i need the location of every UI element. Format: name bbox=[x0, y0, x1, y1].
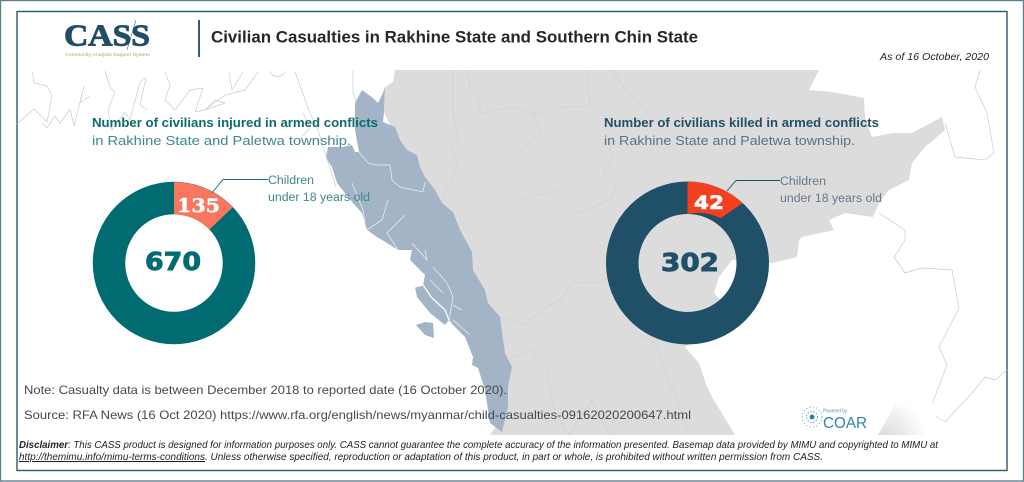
note: Note: Casualty data is between December 2018 to reported date (16 October 2020). bbox=[24, 383, 507, 397]
logo shadow bbox=[878, 403, 935, 435]
value: children killed: 42 bbox=[694, 192, 724, 214]
heading: injured: Number of civilians injured in armed conflicts bbox=[92, 115, 378, 130]
map: internal boundaries bbox=[442, 70, 689, 435]
icon: COAR network bbox=[802, 407, 822, 427]
label: children injured: under 18 years old bbox=[268, 192, 370, 204]
leader line: killed bbox=[727, 180, 780, 191]
wedge: children killed bbox=[688, 182, 743, 218]
map: Rakhine inner lines bbox=[352, 152, 470, 335]
title divider bbox=[198, 20, 200, 57]
logo tagline: Community Analysis Support System bbox=[65, 52, 150, 58]
logo: CASS: CASS bbox=[64, 18, 150, 52]
subheading: injured: in Rakhine State and Paletwa township. bbox=[92, 133, 351, 148]
value: total killed: 302 bbox=[661, 248, 719, 277]
source: Source: RFA News (16 Oct 2020) https://www.rfa.org/english/news/myanmar/child-casualties-09162020200647.html bbox=[24, 408, 691, 422]
map: Myanmar basemap bbox=[17, 70, 1007, 435]
wordmark: COAR bbox=[823, 415, 867, 432]
map: coastlines and borders bbox=[17, 70, 1007, 422]
wedge: children injured bbox=[174, 182, 233, 230]
value: children injured: 135 bbox=[177, 195, 220, 217]
donut chart: injured bbox=[109, 182, 239, 328]
label: children killed: Children bbox=[780, 176, 826, 188]
date stamp: As of 16 October, 2020 bbox=[879, 51, 989, 63]
disclaimer bbox=[19, 440, 939, 463]
leader line: injured bbox=[212, 180, 268, 193]
heading: killed: Number of civilians killed in armed conflicts bbox=[604, 115, 879, 130]
value: total injured: 670 bbox=[145, 247, 201, 276]
panel: injured bbox=[92, 115, 378, 328]
panel: killed bbox=[604, 115, 882, 328]
disclaimer: http://themimu.info/mimu-terms-conditions. Unless otherwise specified, reproduction or adaptation of this product, in part or whole, is prohibited without written permission from CASS. bbox=[19, 452, 823, 463]
label: children killed: under 18 years old bbox=[780, 193, 882, 205]
label: children injured: Children bbox=[268, 175, 314, 187]
label: children injured bbox=[268, 175, 370, 204]
powered by: Powered by bbox=[823, 408, 847, 414]
donut chart: killed bbox=[622, 182, 753, 328]
title: Civilian Casualties in Rakhine State and Southern Chin State bbox=[211, 28, 698, 46]
logo: COAR bbox=[802, 403, 935, 435]
map: Rakhine and Paletwa region bbox=[326, 87, 512, 432]
label: children killed bbox=[780, 176, 882, 205]
map: Rakhine island bbox=[416, 322, 434, 338]
map: grey landmass bbox=[384, 70, 945, 435]
disclaimer: Disclaimer: This CASS product is designed for information purposes only. CASS cannot guarantee the complete accuracy of the information presented. Basemap data provided by MIMU and copyrighted to MIMU at bbox=[19, 440, 939, 451]
subheading: killed: in Rakhine State and Paletwa township. bbox=[604, 133, 855, 148]
